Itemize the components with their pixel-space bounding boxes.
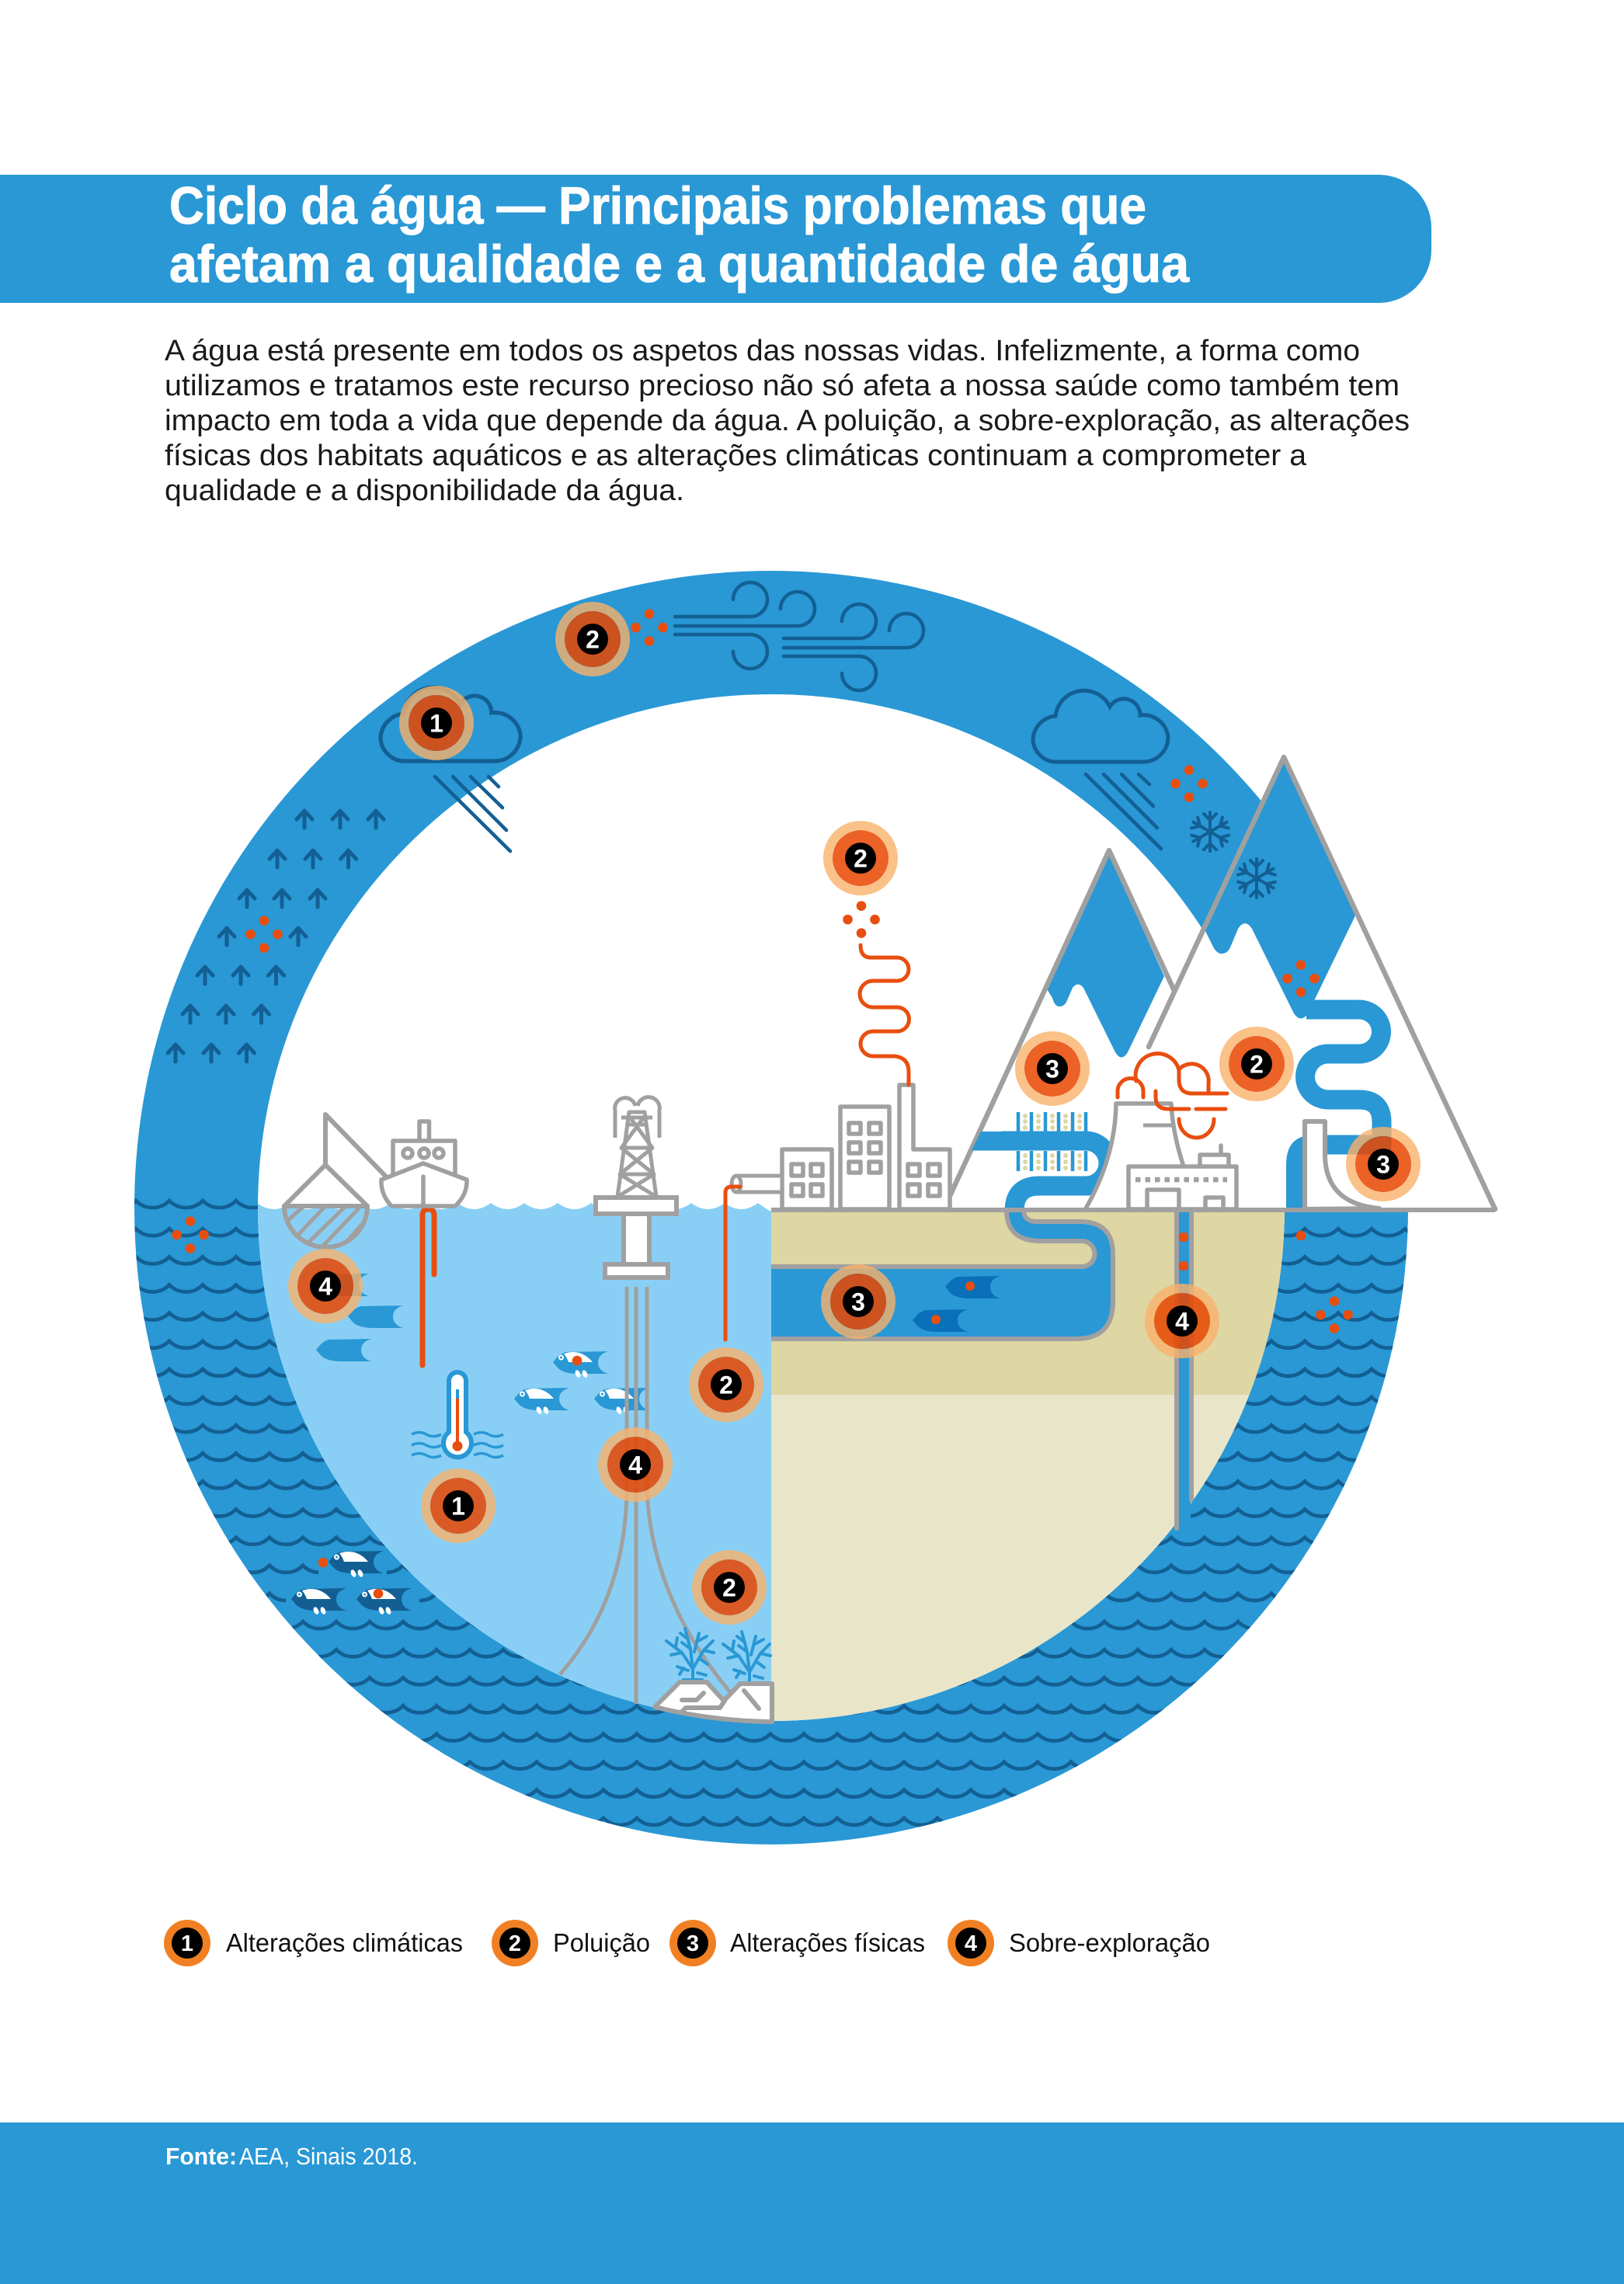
ship discharge — [423, 1209, 434, 1365]
intro text: físicas dos habitats aquáticos e as alterações climáticas continuam a comprometer a — [165, 440, 1307, 472]
intro text: impacto em toda a vida que depende da água. A poluição, a sobre-exploração, as alterações — [165, 405, 1410, 437]
rain left — [435, 777, 510, 851]
legend item: pollution — [492, 1920, 650, 1966]
intro text: qualidade e a disponibilidade da água. — [165, 475, 684, 507]
fish stock under trawler — [314, 1274, 403, 1361]
wind — [675, 582, 923, 690]
thermometer — [412, 1372, 503, 1457]
rig pipelines — [560, 1287, 731, 1704]
badge: 1 climate, cloud: 1 — [429, 710, 443, 738]
legend item: physical changes: 3 — [687, 1931, 699, 1956]
coral left — [666, 1629, 714, 1680]
right mountain — [1075, 757, 1495, 1209]
ship — [381, 1121, 467, 1206]
fish in river — [913, 1276, 1000, 1332]
dots in left waves — [172, 1216, 209, 1253]
coral right — [723, 1632, 770, 1683]
footer with source — [0, 2122, 1624, 2284]
badge: 2 pollution, wind: 2 — [586, 626, 600, 654]
sea water — [258, 1203, 771, 1707]
badge: 3 physical, river: 3 — [851, 1288, 865, 1316]
badge: 4 over-exploitation, well: 4 — [1175, 1308, 1189, 1336]
groundwater well — [1177, 1210, 1191, 1528]
legend item: over-exploitation: 4 — [965, 1931, 977, 1956]
single dot at the shore — [1296, 1231, 1306, 1240]
badge: 2 pollution, smoke: 2 — [854, 845, 868, 873]
outflow pipe — [725, 1176, 782, 1340]
badge: 4 over-exploitation, rig — [603, 1432, 668, 1497]
ring waves — [103, 1201, 1505, 1825]
nuclear cooling tower — [1086, 1104, 1184, 1208]
badge: 4 over-exploitation, trawler: 4 — [318, 1272, 332, 1300]
dots above smoke — [843, 901, 880, 938]
badge: 4 over-exploitation, well — [1149, 1288, 1215, 1354]
badge: 1 climate, thermometer — [426, 1473, 491, 1538]
outer ring — [134, 571, 1408, 1844]
dark fish in the ring — [286, 1549, 419, 1615]
dots near right rain — [1170, 765, 1208, 802]
water cycle diagram — [103, 571, 1505, 1844]
badge: 4 over-exploitation, rig: 4 — [628, 1451, 642, 1479]
snowflake in ring — [1190, 812, 1230, 851]
badge: 3 physical, river — [826, 1269, 891, 1334]
dots on snowcap — [1282, 960, 1320, 997]
factory buildings — [782, 1085, 950, 1209]
power plant building — [1128, 1145, 1236, 1209]
dots in right waves — [1316, 1296, 1353, 1333]
dots among arrows — [245, 916, 283, 953]
ground layers — [771, 1209, 1292, 1729]
intro text — [165, 335, 1410, 507]
badge: 2 pollution, reef: 2 — [722, 1573, 736, 1601]
legend item: physical changes: Alterações físicas — [730, 1928, 925, 1957]
badge: 2 pollution, smoke — [828, 826, 893, 891]
badge: 2 pollution, reef — [697, 1555, 762, 1620]
seabed rocks — [655, 1682, 772, 1722]
cloud right — [1033, 690, 1168, 762]
intro text: utilizamos e tratamos este recurso precioso não só afeta a nossa saúde como também tem — [165, 370, 1400, 402]
badge: 3 physical, left mountain — [1020, 1036, 1085, 1101]
legend item: pollution: 2 — [509, 1931, 521, 1956]
pollution dots in air — [631, 609, 668, 646]
badge: 1 climate, cloud — [404, 690, 469, 756]
badge: 2 pollution, power plant: 2 — [1250, 1050, 1264, 1078]
ground river — [771, 1210, 1113, 1339]
badge: 3 physical, dam: 3 — [1376, 1151, 1390, 1179]
footer with source: Fonte: — [165, 2143, 237, 2170]
legend item: over-exploitation — [948, 1920, 1210, 1966]
legend item: pollution: Poluição — [553, 1928, 650, 1957]
snowflake on mountain — [1236, 859, 1277, 898]
badge: 4 over-exploitation, trawler — [293, 1253, 358, 1319]
legend item: physical changes — [669, 1920, 925, 1966]
badge: 2 pollution, wind — [560, 607, 625, 672]
badge: 3 physical, left mountain: 3 — [1045, 1055, 1059, 1083]
badge: 1 climate, thermometer: 1 — [451, 1493, 465, 1521]
badge: 3 physical, dam — [1351, 1132, 1416, 1197]
fish group in sea — [514, 1351, 649, 1415]
factory smoke — [860, 945, 909, 1085]
title banner: afetam a qualidade e a quantidade de água — [169, 235, 1190, 294]
legend item: climate change: Alterações climáticas — [226, 1928, 463, 1957]
badge: 2 pollution, power plant — [1224, 1031, 1289, 1097]
cloud left — [381, 687, 520, 761]
evaporation arrows — [168, 811, 384, 1062]
ground line — [771, 1208, 1495, 1212]
left mountain — [950, 850, 1175, 1212]
badge: 2 pollution, pipe: 2 — [719, 1371, 733, 1399]
badge: 2 pollution, pipe — [694, 1352, 759, 1417]
oil rig — [596, 1097, 676, 1278]
legend item: over-exploitation: Sobre-exploração — [1009, 1928, 1210, 1957]
title banner — [0, 175, 1431, 303]
legend item: climate change — [164, 1920, 463, 1966]
title banner: Ciclo da água — Principais problemas que — [169, 176, 1146, 235]
dam racks — [1018, 1112, 1086, 1171]
intro text: A água está presente em todos os aspetos das nossas vidas. Infelizmente, a forma como — [165, 335, 1360, 367]
trawler net — [284, 1114, 385, 1247]
rain right — [1086, 774, 1161, 849]
inner white circle — [258, 694, 1285, 1721]
footer with source: AEA, Sinais 2018. — [239, 2143, 418, 2170]
orange steam from the tower — [1118, 1054, 1227, 1138]
legend — [164, 1920, 1210, 1966]
legend item: climate change: 1 — [181, 1931, 193, 1956]
